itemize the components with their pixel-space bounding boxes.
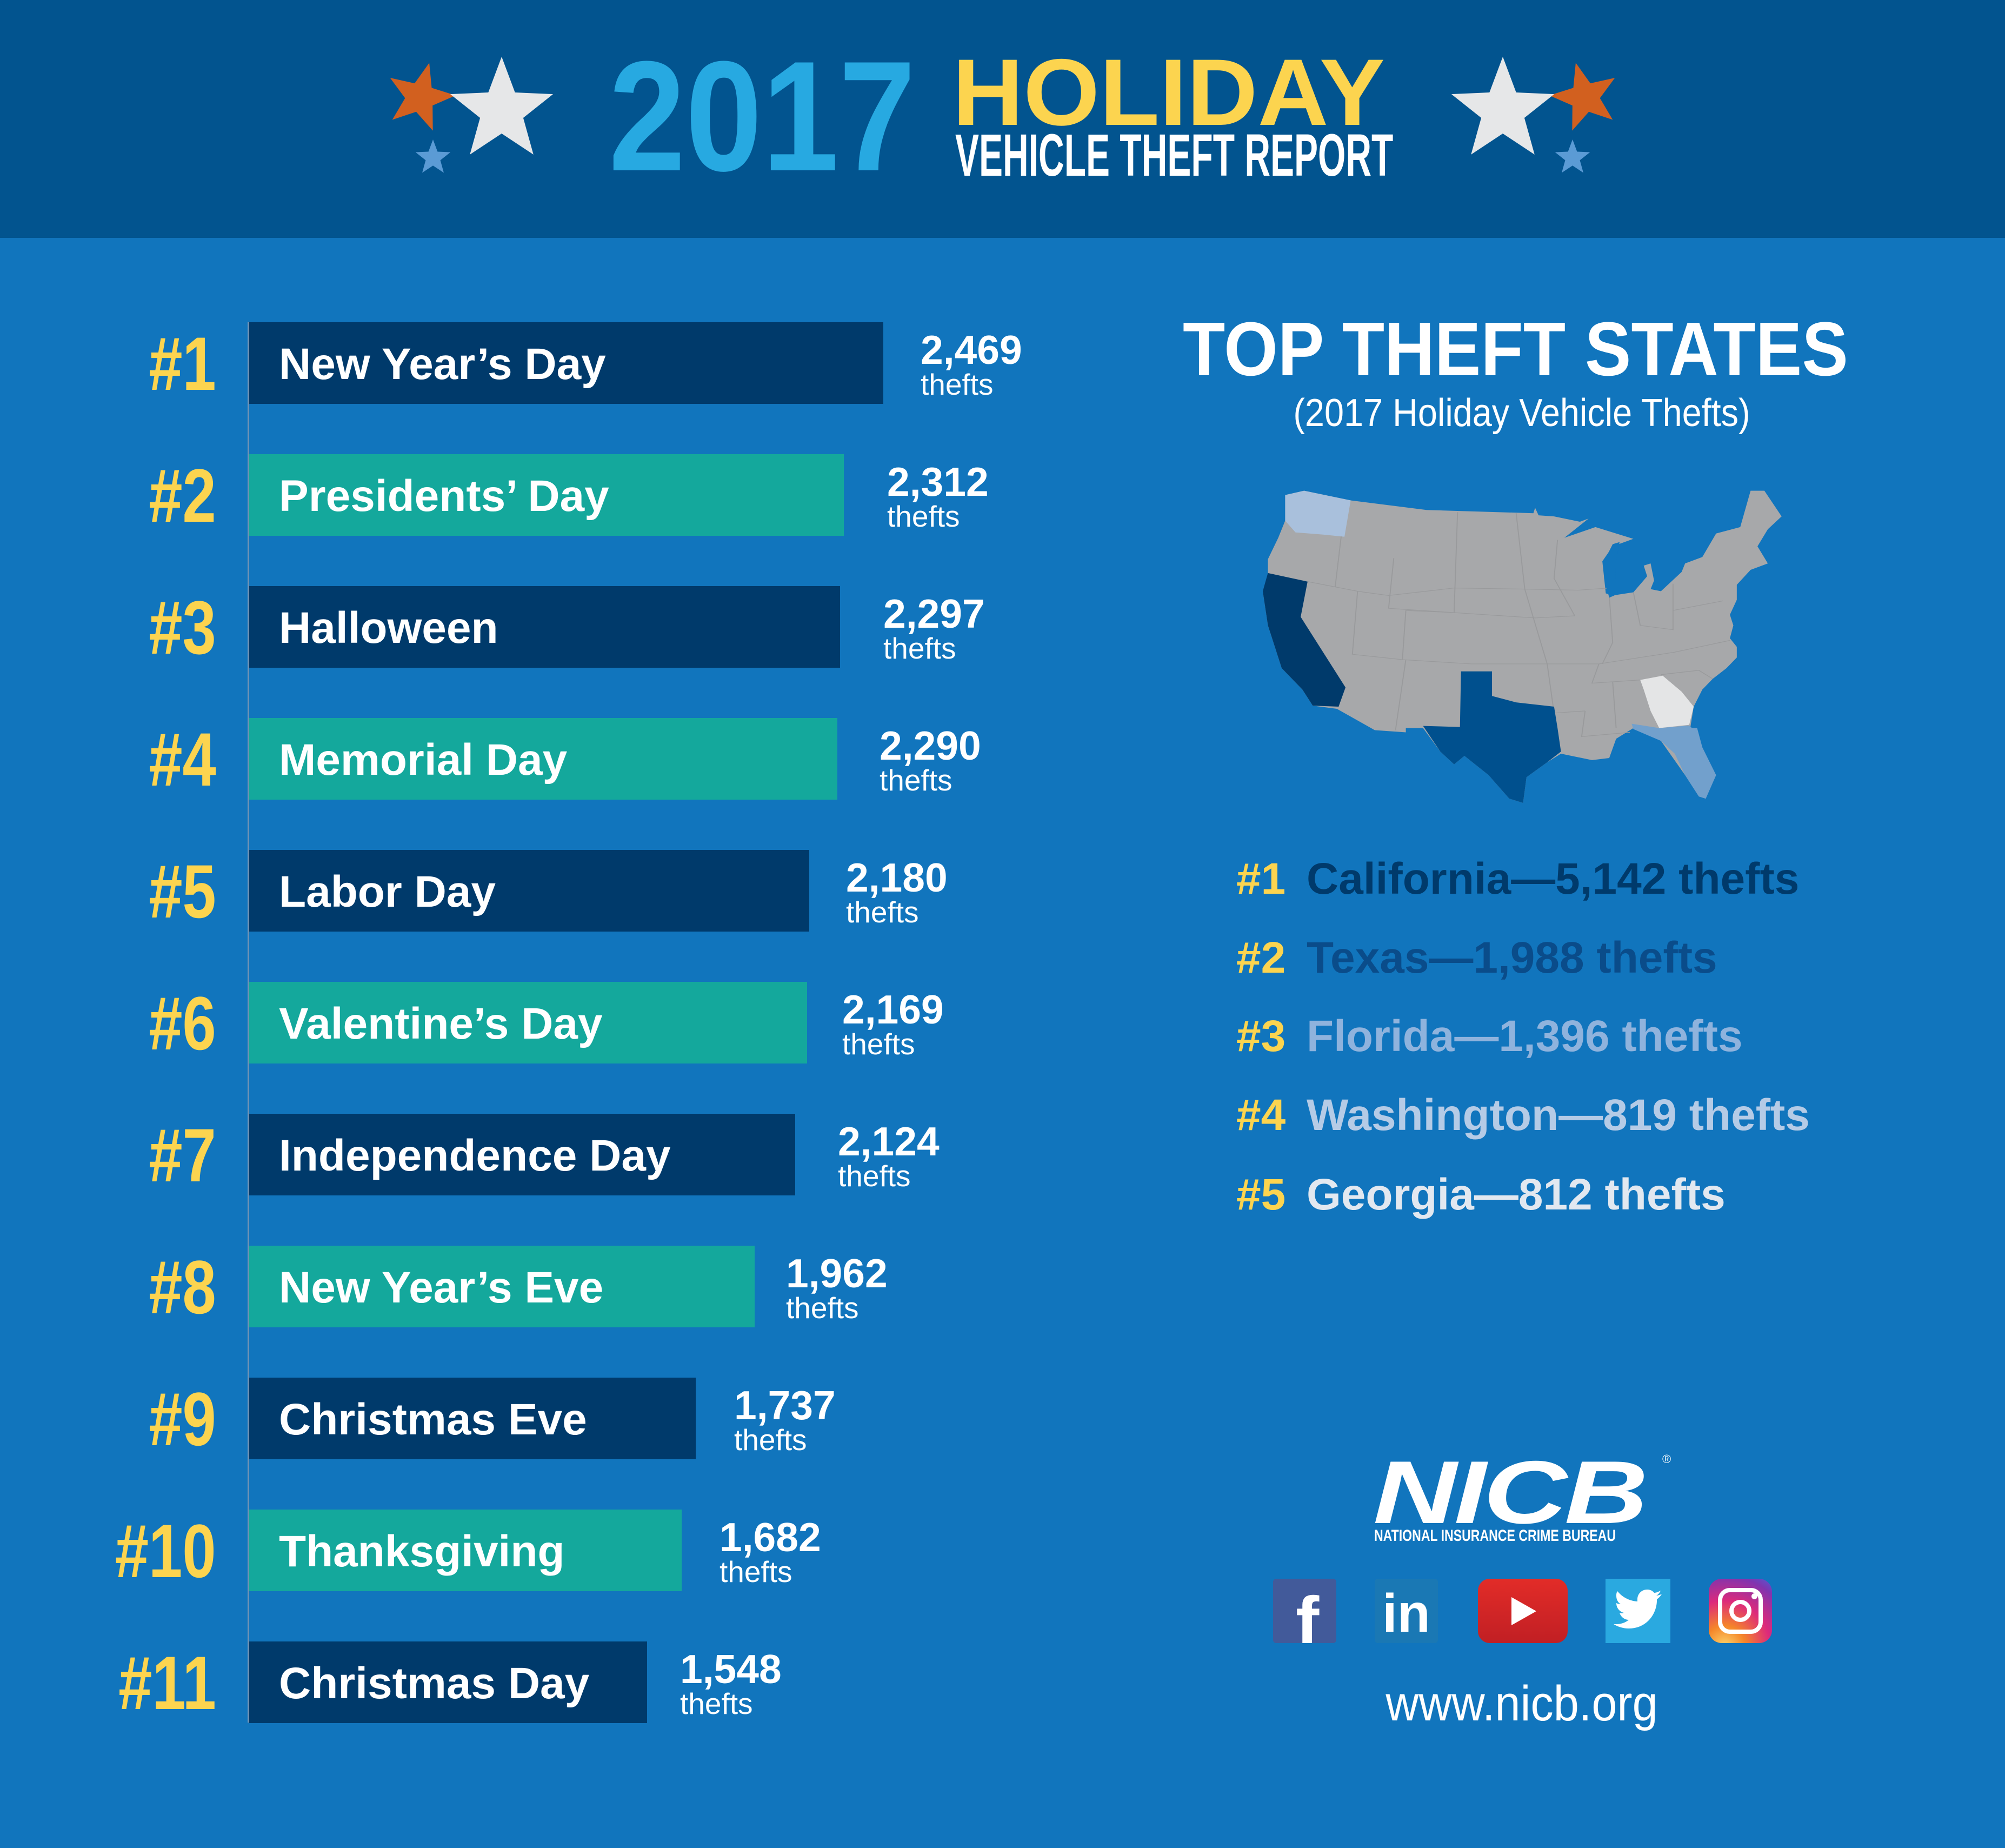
row 3 [149,585,985,670]
row 7: Independence Day [279,1131,671,1180]
Georgia [1640,676,1694,728]
row 7 [149,1113,940,1198]
row 9: thefts [734,1423,807,1457]
row 8: 1,962 [786,1251,888,1296]
icon: youtube [1478,1579,1568,1643]
row 8: #8 [149,1245,216,1330]
row 8 [149,1245,888,1330]
state 4: Washington—819 thefts [1307,1091,1810,1140]
state 1: California—5,142 thefts [1307,854,1799,903]
row 4 [149,717,981,802]
row 5 [149,849,948,934]
state 5: Georgia—812 thefts [1307,1170,1726,1219]
row 4: 2,290 [880,723,981,768]
state 2: #2 [1236,933,1285,982]
row 6 [149,981,944,1066]
icon: instagram [1709,1579,1772,1643]
state 1: #1 [1236,854,1285,903]
row 11 [118,1640,782,1725]
row 11: 1,548 [680,1646,782,1692]
row 2: #2 [149,453,216,538]
subtitle: vehicle theft report: VEHICLE THEFT REPORT [955,122,1393,189]
row 5: Labor Day [279,867,496,916]
row 6: thefts [842,1027,915,1061]
row 2: Presidents’ Day [279,471,609,521]
row 10: #10 [115,1508,216,1593]
row 1: New Year’s Day [279,340,606,389]
row 10 [115,1508,821,1593]
row 11: Christmas Day [279,1659,589,1708]
row 3: Halloween [279,603,498,653]
logo: NICB: NICB [1373,1442,1646,1542]
state 4: #4 [1236,1091,1285,1140]
header band [0,0,2005,238]
icon: facebook [1273,1579,1336,1643]
logo: NICB: ® [1662,1452,1671,1466]
row 6: 2,169 [842,987,944,1032]
row 2: thefts [887,500,960,533]
heading: top theft states: TOP THEFT STATES [1183,306,1848,391]
Texas [1423,672,1561,803]
row 1: #1 [149,321,216,406]
logo: NICB: NATIONAL INSURANCE CRIME BUREAU [1374,1527,1616,1545]
state 3: Florida—1,396 thefts [1307,1012,1743,1061]
Washington [1285,491,1351,537]
row 6: #6 [149,981,216,1066]
row 2: 2,312 [887,459,989,504]
row 1: thefts [921,368,994,401]
bar chart: holidays [115,321,1022,1725]
icon: left stars [380,54,553,173]
row 8: New Year’s Eve [279,1263,603,1312]
row 7: thefts [838,1159,911,1193]
row 2 [149,453,989,538]
row 3: #3 [149,585,216,670]
row 11: #11 [118,1640,216,1725]
url: www.nicb.org [1385,1676,1658,1731]
row 9: 1,737 [734,1382,836,1428]
subheading: (2017 Holiday Vehicle Thefts) [1293,391,1750,435]
header stars [390,57,1615,173]
row 3: thefts [883,631,956,665]
state 2: Texas—1,988 thefts [1307,933,1717,982]
state 5: #5 [1236,1170,1285,1219]
icon: twitter [1606,1579,1670,1643]
row 9: Christmas Eve [279,1395,587,1444]
row 3: 2,297 [883,591,985,636]
row 9 [149,1377,836,1461]
row 10: 1,682 [720,1514,821,1560]
row 10: Thanksgiving [279,1527,565,1576]
row 5: thefts [846,895,919,929]
icon: linkedin: in [1382,1583,1430,1644]
row 4: Memorial Day [279,735,567,785]
row 4: #4 [149,717,216,802]
row 10: thefts [720,1555,792,1588]
title: HOLIDAY: HOLIDAY [952,40,1385,145]
list: top theft states [1236,854,1810,1219]
title: 2017: 2017 [609,29,916,204]
row 7: #7 [149,1113,216,1198]
row 7: 2,124 [838,1119,940,1164]
row 9: #9 [149,1377,216,1461]
row 4: thefts [880,763,952,797]
row 8: thefts [786,1291,859,1325]
row 5: #5 [149,849,216,934]
row 5: 2,180 [846,855,948,900]
state 3: #3 [1236,1012,1285,1061]
icon: right stars [1451,54,1625,173]
social icons [1273,1579,1772,1644]
row 6: Valentine’s Day [279,999,603,1048]
row 1 [149,321,1022,406]
Florida [1631,724,1716,799]
California [1263,573,1345,707]
map: US states [1263,491,1782,803]
axis line [248,322,249,1723]
row 1: 2,469 [921,327,1022,373]
row 11: thefts [680,1687,753,1720]
